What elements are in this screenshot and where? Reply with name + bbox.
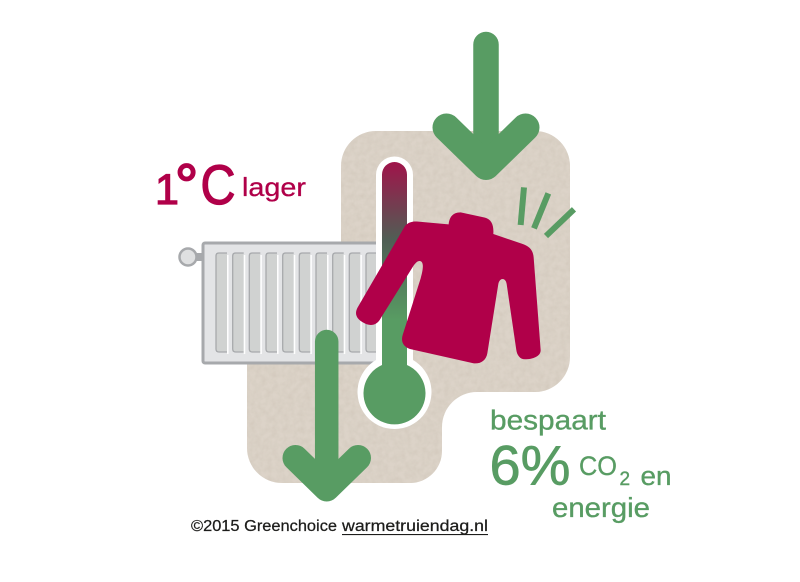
text: bespaart 6% CO2 en energie bbox=[490, 404, 672, 523]
text: bespaart 6% CO2 en energie: CO bbox=[579, 451, 617, 481]
text: bespaart 6% CO2 en energie: 6% bbox=[490, 434, 570, 496]
icon: thermometer bbox=[358, 156, 432, 429]
heading: 1°C lager: ° bbox=[175, 153, 198, 218]
icon: warmth lines bbox=[521, 187, 574, 236]
text: bespaart 6% CO2 en energie: en bbox=[640, 461, 672, 491]
heading: 1°C lager: lager bbox=[242, 172, 306, 202]
arrow: down, top bbox=[446, 44, 526, 166]
panel: beige background shape bbox=[247, 131, 570, 483]
icon: radiator bbox=[180, 243, 393, 363]
arrow: down, bottom bbox=[296, 342, 358, 488]
icon: red sweater bbox=[356, 212, 541, 363]
footer: copyright and link bbox=[191, 518, 488, 535]
text: bespaart 6% CO2 en energie: 2 bbox=[620, 469, 630, 490]
footer: copyright and link: warmetruiendag.nl bbox=[341, 518, 488, 535]
heading: 1°C lager: 1 bbox=[155, 166, 179, 214]
footer: copyright and link: ©2015 Greenchoice bbox=[191, 518, 337, 535]
heading: 1°C lager bbox=[155, 153, 306, 218]
heading: 1°C lager: C bbox=[200, 153, 236, 216]
text: bespaart 6% CO2 en energie: bespaart bbox=[490, 404, 606, 436]
text: bespaart 6% CO2 en energie: energie bbox=[552, 492, 650, 523]
